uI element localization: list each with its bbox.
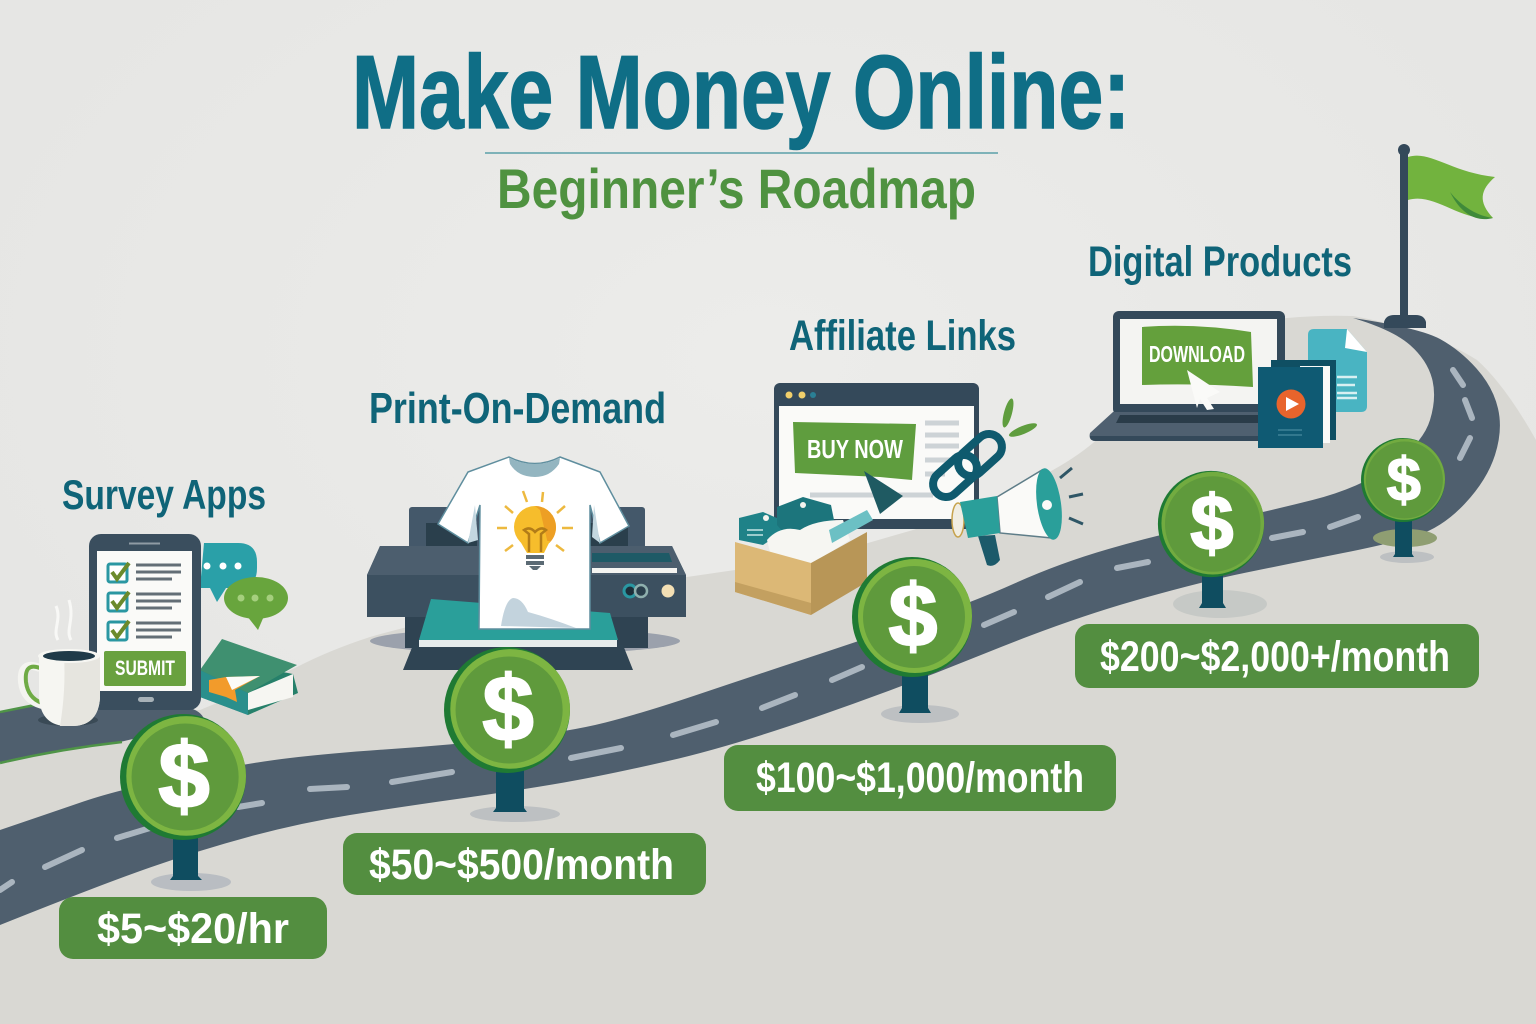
- income tag: $200~$2,000+/month: $200~$2,000+/month: [1100, 633, 1450, 681]
- book: [200, 639, 298, 715]
- subtitle: Beginner’s Roadmap: [497, 157, 976, 220]
- coffee mug: [22, 600, 100, 726]
- box of products: [735, 497, 873, 615]
- chain link: [928, 397, 1038, 502]
- icon: affiliate browser, box, link, megaphone: BUY NOW: [807, 434, 903, 464]
- goal flag: [1384, 144, 1495, 328]
- marker: print-on-demand: $: [482, 656, 534, 760]
- income tag: $100~$1,000/month: $100~$1,000/month: [756, 754, 1084, 802]
- income tag: $100~$1,000/month: [724, 745, 1116, 811]
- step labels: [62, 238, 1352, 518]
- income tag: $5~$20/hr: [59, 897, 327, 959]
- phone: [89, 534, 201, 710]
- icon: download laptop, book, document: [1090, 311, 1367, 448]
- title: Make Money Online:: [352, 35, 1130, 151]
- phone: SUBMIT: [115, 657, 175, 680]
- title: [352, 35, 1130, 220]
- marker: final step: [1361, 438, 1445, 563]
- income tag: $50~$500/month: $50~$500/month: [369, 841, 674, 889]
- marker: digital products: [1158, 471, 1267, 618]
- marker: digital products: $: [1190, 480, 1234, 567]
- icon: t-shirt printer: [367, 457, 686, 670]
- income tag: $5~$20/hr: $5~$20/hr: [97, 905, 289, 953]
- marker: print-on-demand: [444, 647, 570, 822]
- marker: affiliate links: [852, 557, 972, 723]
- icon: light bulb: [497, 491, 573, 570]
- marker: survey apps: [120, 714, 246, 891]
- megaphone: [952, 467, 1083, 566]
- marker: survey apps: $: [158, 723, 210, 827]
- hill background: [0, 316, 1536, 1024]
- icon: affiliate browser, box, link, megaphone: [735, 383, 1083, 615]
- icon: download laptop, book, document: DOWNLOAD: [1149, 341, 1245, 367]
- upper left road section: [0, 704, 205, 763]
- marker: final step: $: [1387, 445, 1421, 514]
- step labels: Affiliate Links: [789, 312, 1016, 360]
- icon: survey phone, mug, book, chat: [22, 534, 298, 726]
- winding road: [0, 318, 1500, 925]
- step labels: Print-On-Demand: [369, 384, 666, 433]
- chat bubbles: [200, 543, 288, 630]
- step labels: Survey Apps: [62, 471, 266, 518]
- step labels: Digital Products: [1088, 238, 1352, 286]
- marker: affiliate links: $: [889, 566, 937, 665]
- t-shirt: [438, 457, 629, 629]
- income tag: $200~$2,000+/month: [1075, 624, 1479, 688]
